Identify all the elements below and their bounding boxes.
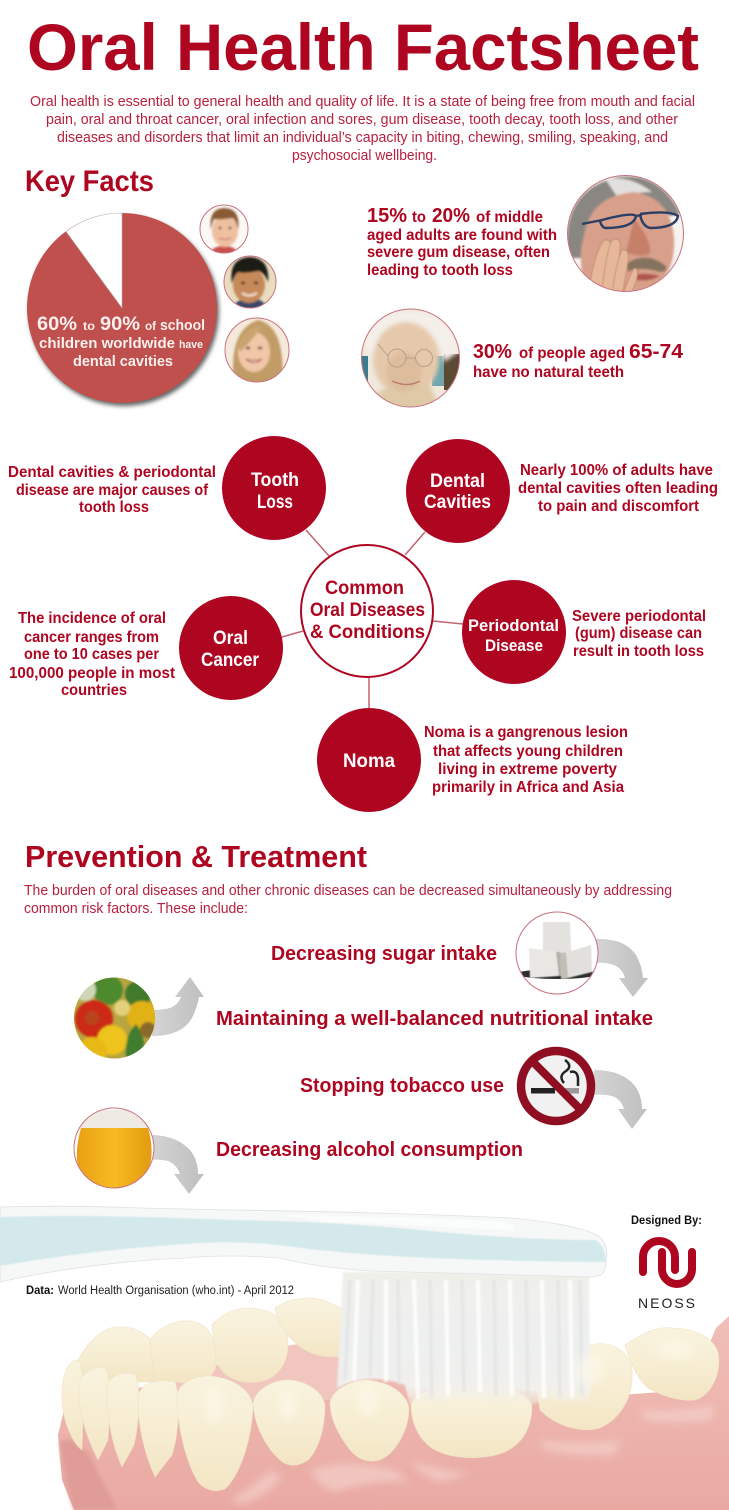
text: oral cancer — [9, 610, 175, 699]
intro text block: Oral health is essential to general health and quality of life. It is a state of being free from mouth and facial — [30, 94, 695, 110]
text: dental cavities: dental cavities often leading — [518, 480, 718, 497]
designer credit and logo — [631, 1215, 702, 1311]
fact: 15% to 20%: to — [412, 209, 426, 226]
arrow: alcohol — [150, 1135, 204, 1194]
node: dental cavities: Dental — [430, 470, 485, 492]
fact: 30% no natural teeth: of people aged — [519, 345, 625, 362]
front lower teeth — [62, 1360, 409, 1491]
text: tooth loss — [8, 464, 216, 516]
photo: older woman — [361, 309, 462, 410]
fact: 15% to 20%: of middle — [476, 209, 543, 226]
text: dental cavities — [518, 462, 718, 515]
node: tooth loss — [222, 436, 326, 540]
heading: prevention and treatment: Prevention & Treatment — [25, 839, 367, 874]
photo: teeth and gums — [58, 1272, 729, 1510]
icon: neoss logo — [643, 1241, 692, 1284]
data source credit: Data: — [26, 1285, 54, 1297]
gums — [58, 1316, 729, 1510]
heading: key facts: Key Facts — [25, 165, 154, 198]
node: periodontal disease — [462, 580, 566, 684]
text: periodontal disease: result in tooth loss — [573, 643, 704, 660]
hub: common oral diseases and conditions: & Conditions — [310, 622, 425, 643]
text: oral cancer: one to 10 cases per — [24, 646, 159, 663]
node: dental cavities — [406, 439, 510, 543]
node: noma — [317, 708, 421, 812]
pie label: 90% — [100, 314, 140, 335]
intro text block: psychosocial wellbeing. — [292, 148, 437, 164]
text: oral cancer: countries — [61, 682, 127, 699]
arrow: tobacco to alcohol — [594, 1070, 647, 1129]
data source credit: World Health Organisation (who.int) - April 2012 — [58, 1285, 294, 1297]
prevention intro text: The burden of oral diseases and other chronic diseases can be decreased simultaneously by addressing — [24, 883, 672, 899]
item: decreasing sugar intake: Decreasing sugar intake — [271, 943, 497, 965]
fact: 15% to 20%: severe gum disease, often — [367, 244, 550, 261]
connector lines — [282, 530, 463, 710]
text: tooth loss: Dental cavities & periodontal — [8, 464, 216, 481]
fact: 30% no natural teeth: 65-74 — [629, 341, 684, 363]
photo: boy two — [224, 256, 276, 310]
toothbrush bristles — [337, 1272, 590, 1408]
arrow: sugar to nutrition — [596, 939, 648, 997]
hub: common oral diseases and conditions — [301, 545, 433, 677]
node: periodontal disease: Disease — [485, 636, 543, 655]
fact: 15% to 20% — [367, 205, 557, 279]
text: tooth loss: disease are major causes of — [16, 482, 209, 499]
photo: sugar cubes — [516, 912, 598, 994]
prevention intro text: common risk factors. These include: — [24, 901, 248, 917]
gum left ridges — [60, 1440, 118, 1510]
text: oral cancer: cancer ranges from — [24, 629, 159, 646]
inner gum floor — [160, 1340, 345, 1400]
item: balanced nutritional intake: Maintaining a well-balanced nutritional intake — [216, 1008, 653, 1030]
fact: 30% no natural teeth: 30% — [473, 341, 512, 363]
pie label: of — [145, 319, 157, 333]
node: tooth loss: Tooth — [251, 469, 299, 491]
node: oral cancer: Cancer — [201, 649, 259, 671]
text: noma — [424, 724, 628, 796]
text: oral cancer: 100,000 people in most — [9, 665, 175, 682]
text: tooth loss: tooth loss — [79, 499, 149, 516]
back teeth — [72, 1298, 345, 1383]
toothbrush handle — [0, 1206, 607, 1282]
pie label: children worldwide — [39, 336, 175, 352]
pie label: have — [179, 339, 203, 351]
fact: 15% to 20%: aged adults are found with — [367, 227, 557, 244]
tooth highlights — [204, 1340, 693, 1423]
node: tooth loss: Loss — [257, 491, 293, 513]
pie label: school — [160, 317, 205, 334]
pie label — [37, 314, 205, 370]
node: periodontal disease: Periodontal — [468, 616, 559, 635]
photo: glass of beer — [73, 1107, 155, 1190]
pie label: to — [83, 319, 95, 333]
pie label: dental cavities — [73, 354, 173, 370]
text: noma: living in extreme poverty — [438, 761, 617, 778]
photo: older man with toothache — [567, 175, 685, 296]
intro text block: pain, oral and throat cancer, oral infection and sores, gum disease, tooth decay, tooth loss, and other — [46, 112, 678, 128]
item: decreasing alcohol consumption: Decreasing alcohol consumption — [216, 1139, 523, 1161]
icon: no smoking sign — [521, 1051, 591, 1121]
text: dental cavities: Nearly 100% of adults have — [520, 462, 713, 479]
text: noma: primarily in Africa and Asia — [432, 779, 624, 796]
fact: 30% no natural teeth — [473, 341, 684, 381]
text: oral cancer: The incidence of oral — [18, 610, 166, 627]
text: noma: Noma is a gangrenous lesion — [424, 724, 628, 741]
text: dental cavities: to pain and discomfort — [538, 498, 699, 515]
fact: 15% to 20%: 20% — [432, 205, 470, 227]
rear right teeth — [411, 1328, 719, 1458]
fact: 15% to 20%: leading to tooth loss — [367, 262, 513, 279]
gum highlights — [230, 1405, 715, 1504]
pie chart: school children with cavities — [27, 213, 219, 406]
fact: 30% no natural teeth: have no natural teeth — [473, 364, 624, 381]
intro text block: diseases and disorders that limit an individual’s capacity in biting, chewing, smiling, speaking, and — [57, 130, 668, 146]
photo: boy one — [200, 205, 248, 254]
fact: 15% to 20%: 15% — [367, 205, 407, 227]
text: periodontal disease: (gum) disease can — [575, 625, 702, 642]
pie label: 60% — [37, 314, 77, 335]
node: oral cancer: Oral — [213, 627, 248, 649]
hub: common oral diseases and conditions: Common — [325, 578, 404, 599]
arrow: nutrition up to sugar — [152, 977, 204, 1036]
photo: girl — [225, 318, 289, 384]
intro text block — [30, 94, 695, 164]
text: periodontal disease: Severe periodontal — [572, 608, 706, 625]
item: stopping tobacco use: Stopping tobacco use — [300, 1075, 504, 1097]
text: periodontal disease — [572, 608, 706, 660]
hub: common oral diseases and conditions: Oral Diseases — [310, 600, 425, 621]
prevention intro text — [24, 883, 672, 917]
node: oral cancer — [179, 596, 283, 700]
photo: fruit and vegetables — [74, 978, 155, 1058]
node: dental cavities: Cavities — [424, 491, 491, 513]
designer credit and logo: NEOSS — [638, 1295, 695, 1311]
designer credit and logo: Designed By: — [631, 1215, 702, 1227]
node: noma: Noma — [343, 750, 395, 772]
title: Oral Health Factsheet — [27, 10, 699, 84]
text: noma: that affects young children — [433, 743, 623, 760]
